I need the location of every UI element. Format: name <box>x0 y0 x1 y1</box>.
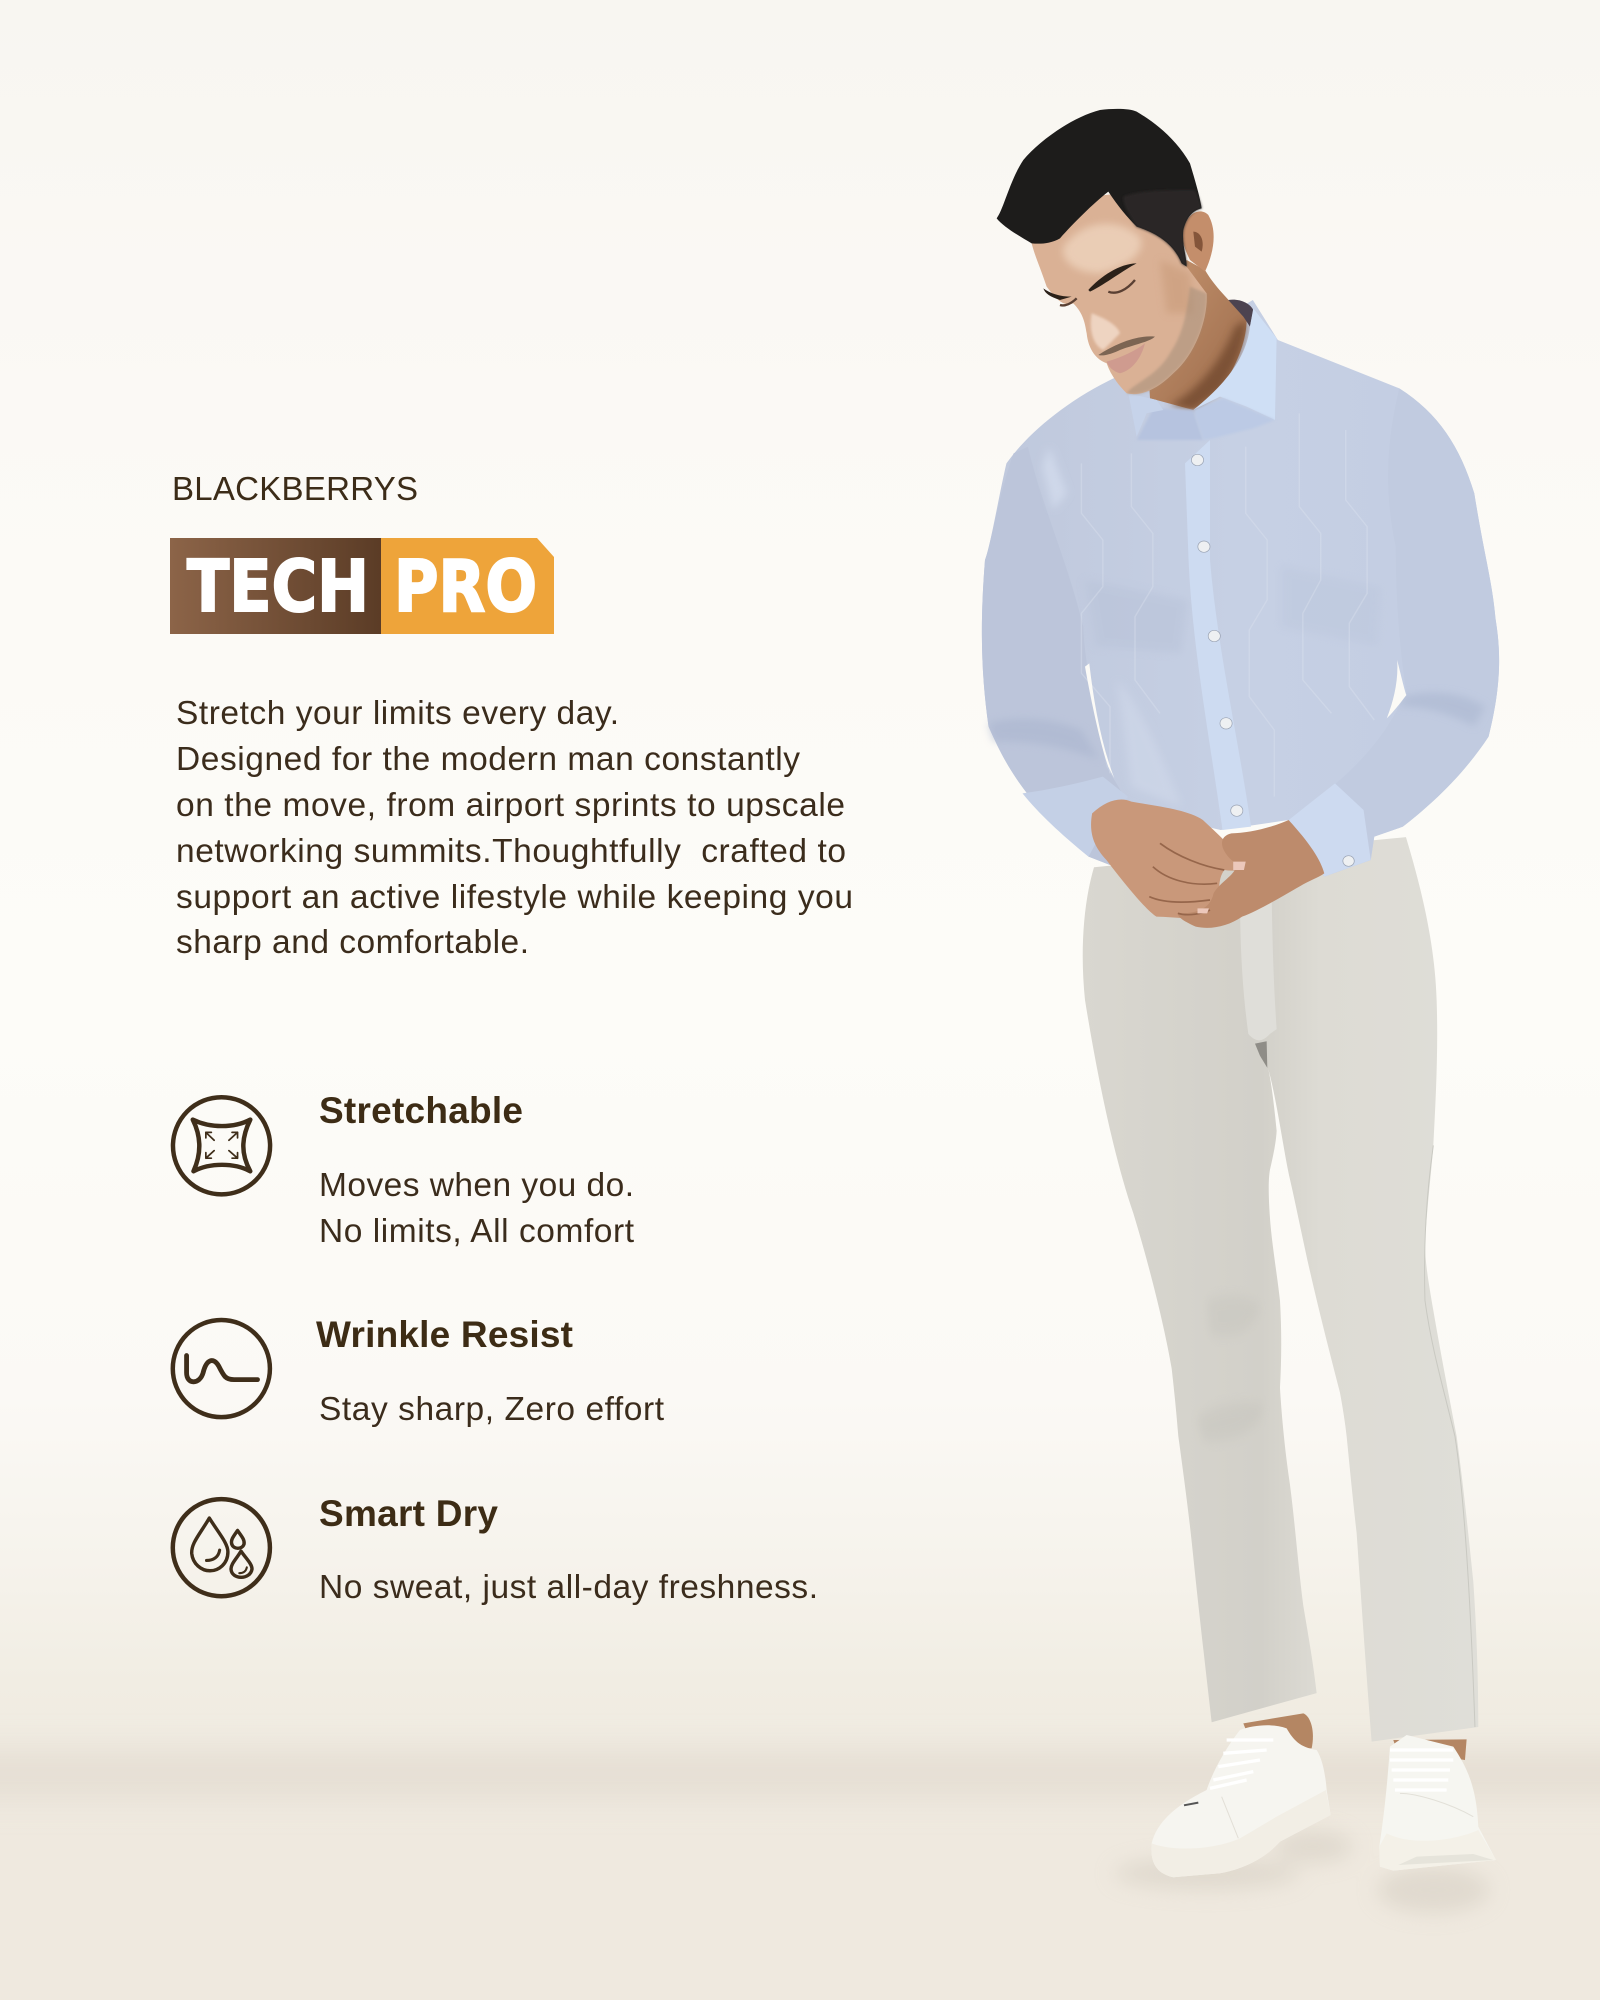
feature: Smart Dry <box>319 1493 818 1606</box>
nose highlight <box>1091 313 1120 350</box>
brand name: BLACKBERRYS <box>172 470 418 507</box>
logo: Tech Pro badge <box>170 538 554 634</box>
stubble <box>1127 287 1207 394</box>
seam <box>1425 1145 1475 1727</box>
description text <box>176 695 853 961</box>
model photo illustration <box>982 109 1499 1913</box>
feature: Smart Dry: No sweat, just all-day freshness. <box>319 1569 818 1606</box>
feature: Stretchable: Stretchable <box>319 1090 523 1131</box>
lips <box>1107 343 1145 373</box>
inner shirt <box>1137 408 1203 440</box>
finger lines <box>1149 843 1224 915</box>
moustache <box>1098 336 1155 355</box>
feature: Stretchable <box>319 1090 635 1250</box>
feature: Stretchable: Moves when you do. <box>319 1167 634 1204</box>
eyebrows <box>1043 263 1137 300</box>
collar right <box>1193 308 1277 420</box>
fingernails <box>1197 862 1246 913</box>
ear <box>1183 211 1214 272</box>
description text: on the move, from airport sprints to upscale <box>176 787 845 824</box>
description text: Designed for the modern man constantly <box>176 741 800 778</box>
fly <box>1240 874 1277 1040</box>
icon: wrinkle resist <box>173 1320 270 1417</box>
knee folds <box>1207 1296 1260 1337</box>
ankles and shoes <box>1151 1713 1496 1877</box>
icon: stretchable <box>173 1097 270 1194</box>
feature: Stretchable: No limits, All comfort <box>319 1213 635 1250</box>
icon: smart dry <box>173 1499 270 1596</box>
shoe shadows <box>1113 1830 1490 1913</box>
arm gaps <box>1085 663 1114 778</box>
placket <box>1185 440 1251 830</box>
eyes <box>1060 280 1135 305</box>
description text: networking summits.Thoughtfully crafted to <box>176 833 846 870</box>
left ankle <box>1243 1713 1313 1748</box>
buttons <box>1191 454 1354 866</box>
feature: Smart Dry: Smart Dry <box>319 1493 498 1534</box>
logo: Tech Pro badge: PRO <box>394 545 537 628</box>
feature: Wrinkle Resist <box>316 1314 665 1428</box>
hair <box>997 109 1202 267</box>
right sleeve <box>1289 388 1499 877</box>
right hand <box>1178 820 1324 928</box>
shirt silhouette <box>982 300 1499 877</box>
face <box>1032 193 1207 394</box>
collar back <box>1228 300 1253 327</box>
right ankle <box>1393 1739 1467 1760</box>
shirt and hands <box>982 300 1499 928</box>
torso shading <box>1042 447 1067 510</box>
description text: Stretch your limits every day. <box>176 695 619 732</box>
description text: sharp and comfortable. <box>176 924 529 961</box>
collar left <box>1128 393 1163 437</box>
logo: Tech Pro badge: TECH <box>187 545 369 628</box>
right shoe <box>1379 1735 1496 1871</box>
head, neck and collar <box>997 109 1277 440</box>
feature: Wrinkle Resist: Wrinkle Resist <box>316 1314 573 1355</box>
fabric pattern <box>1081 413 1374 797</box>
left hand <box>1091 799 1246 918</box>
left shoe <box>1151 1725 1331 1877</box>
trousers <box>1083 837 1478 1742</box>
neck <box>1147 260 1247 410</box>
left sleeve <box>982 447 1124 865</box>
description text: support an active lifestyle while keeping you <box>176 879 853 916</box>
feature: Wrinkle Resist: Stay sharp, Zero effort <box>319 1391 665 1428</box>
